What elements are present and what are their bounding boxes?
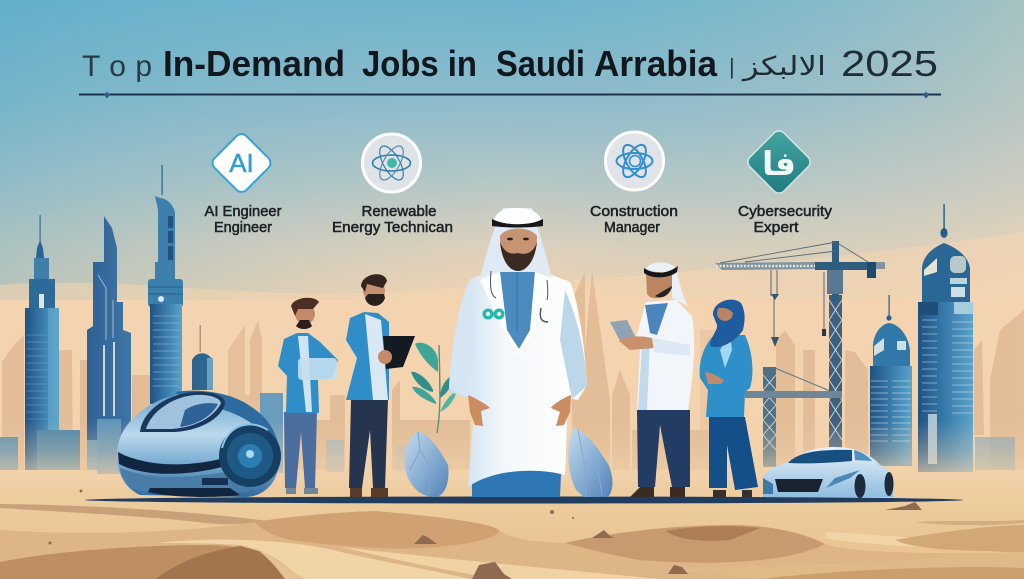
- icon: AI diamond: AI: [229, 148, 254, 178]
- tower crane small: [745, 367, 842, 467]
- title: [82, 43, 938, 84]
- haze over skyline base: [0, 420, 1024, 492]
- figure: central man in white thobe: [449, 208, 587, 497]
- figure: woman in hijab: [700, 300, 758, 497]
- title: T o p: [82, 50, 152, 83]
- job: AI engineer: [204, 131, 282, 236]
- label: AI Engineer: AI Engineer: [204, 203, 282, 220]
- title: Jobs in: [362, 43, 477, 84]
- tower: small dome: [192, 325, 414, 473]
- plant and rock: [405, 343, 457, 497]
- title: 2025: [841, 43, 938, 84]
- title divider: [79, 92, 941, 98]
- desert sand dunes: [0, 482, 1024, 579]
- job: cybersecurity expert: [738, 128, 833, 236]
- tower: left spire: [0, 215, 80, 470]
- icon: atom circle: [362, 134, 420, 192]
- tower: blade skyscraper: [87, 216, 131, 474]
- tower: round tech tower: [148, 165, 183, 404]
- job: construction manager: [590, 132, 678, 236]
- title: Saudi: [496, 43, 585, 84]
- figure: man with tablet in lab coat: [610, 262, 694, 497]
- figure: man with transparent device: [278, 298, 338, 494]
- tower: right mid dome: [870, 295, 912, 466]
- figure: man with tablet: [346, 274, 415, 497]
- label: Construction Manager: Manager: [604, 219, 660, 236]
- label: Renewable Energy Technician: Energy Technican: [332, 219, 453, 236]
- label: AI Engineer: Engineer: [214, 219, 272, 236]
- label: Cybersecurity Expert: Expert: [754, 219, 799, 236]
- label: Cybersecurity Expert: Cybersecurity: [738, 203, 833, 220]
- desert rocks: [48, 490, 922, 579]
- job: renewable energy technician: [332, 134, 453, 236]
- tower crane large: [715, 241, 885, 450]
- icon: teal diamond: فا: [762, 144, 796, 183]
- ground platform: [85, 496, 963, 504]
- rock right of central figure: [568, 428, 613, 497]
- sports car: [763, 447, 894, 498]
- label: Renewable Energy Technician: Renewable: [362, 203, 436, 220]
- icon: flower atom circle: [606, 132, 664, 190]
- distant tan skyline: [2, 270, 1024, 470]
- title: Arrabia: [594, 43, 718, 84]
- tower: right tall clock: [918, 204, 1015, 472]
- title: In-Demand: [163, 43, 345, 84]
- robot vehicle: [117, 391, 281, 497]
- label: Construction Manager: Construction: [590, 203, 678, 220]
- title: |: [729, 54, 735, 79]
- title: الالبكز: [741, 52, 826, 82]
